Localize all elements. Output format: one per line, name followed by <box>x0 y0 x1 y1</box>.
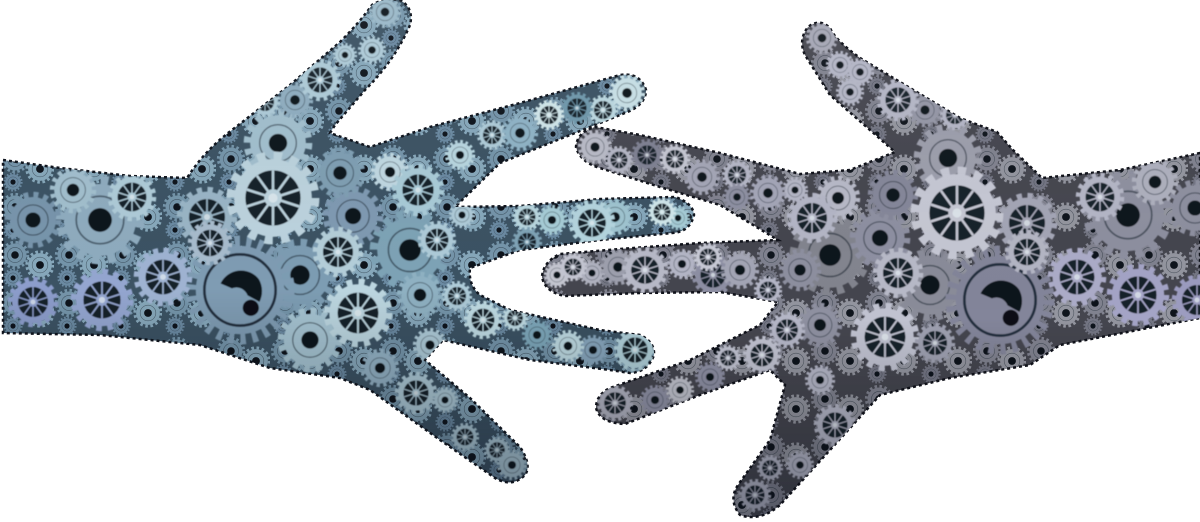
left hand lower shading <box>3 0 694 482</box>
left hand <box>3 0 694 482</box>
right hand silhouette <box>542 23 1200 517</box>
left hand silhouette <box>3 0 694 482</box>
left hand gears <box>8 0 689 479</box>
right hand <box>542 23 1200 517</box>
right hand gears <box>545 23 1200 510</box>
right hand lower shading <box>542 23 1200 517</box>
